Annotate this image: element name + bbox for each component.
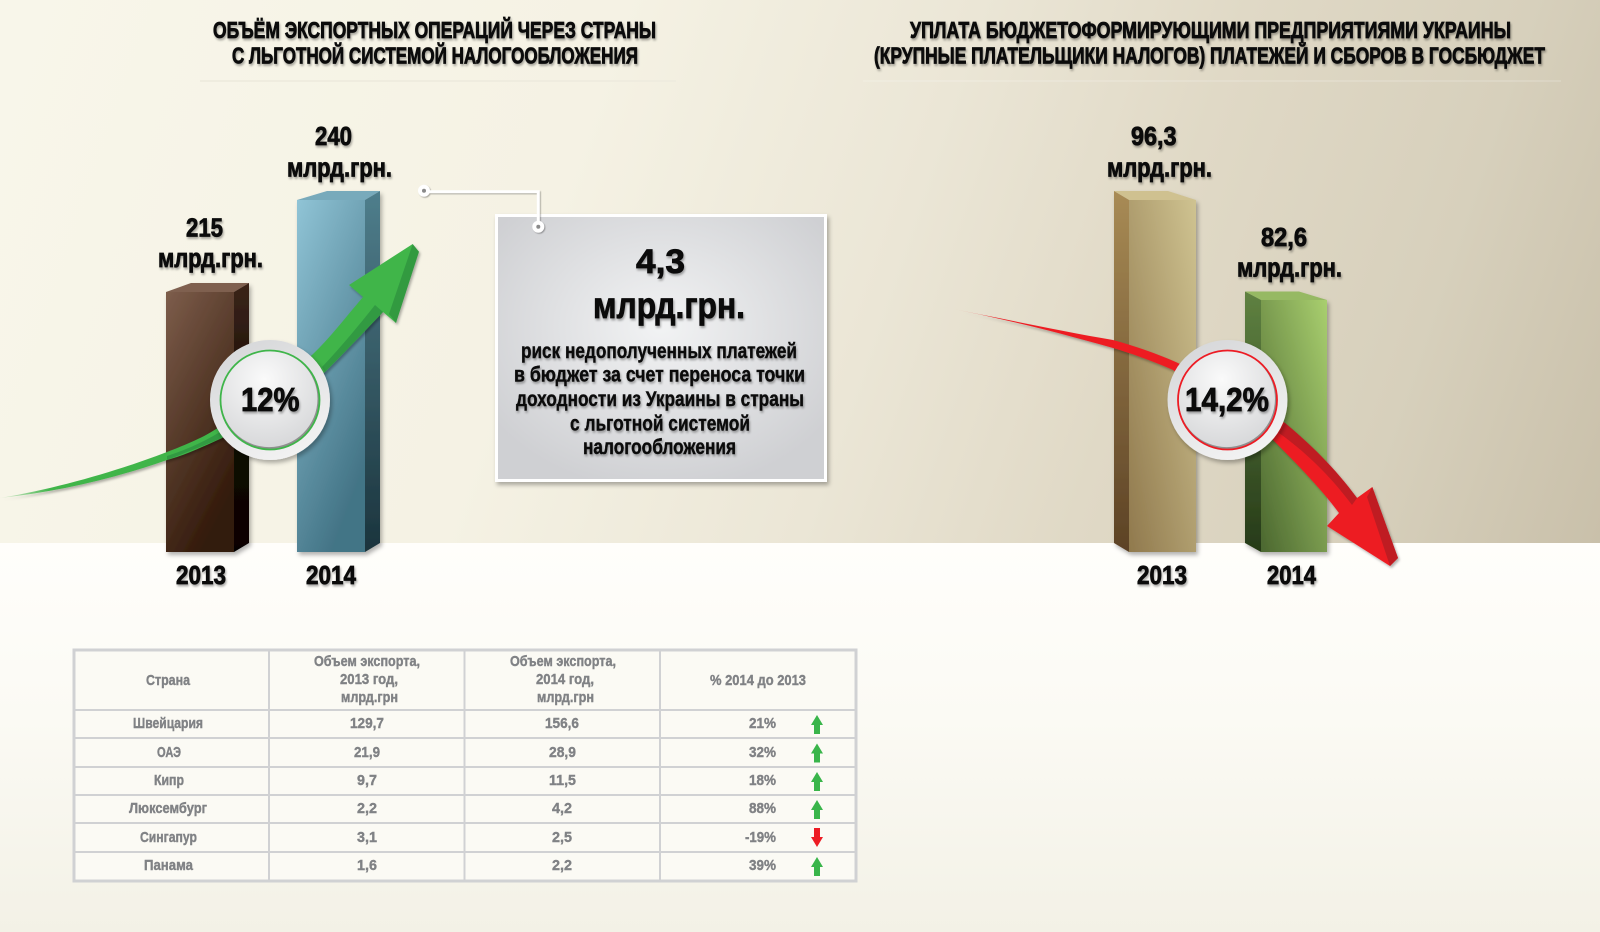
row: Люксембург: [129, 800, 823, 819]
value label: 240: [287, 121, 392, 182]
row: Швейцария: [133, 715, 823, 734]
year labels: export: 2013: [176, 560, 226, 590]
year labels: payments: 2014: [1267, 560, 1316, 590]
row: Сингапур: [140, 828, 823, 847]
row: ОАЭ: 21,9: [354, 744, 380, 761]
row: Кипр: 9,7: [357, 772, 377, 789]
callout: 4.3 bn risk: с льготной системой: [570, 412, 750, 436]
title: export operations: С ЛЬГОТНОЙ СИСТЕМОЙ НАЛОГООБЛОЖЕНИЯ: [232, 42, 638, 68]
table: export by country: [74, 650, 856, 881]
value label: 240: 240: [315, 121, 352, 151]
callout: 4.3 bn risk: млрд.грн.: [593, 285, 745, 326]
bar: payments 2014: [1245, 292, 1327, 552]
row: Люксембург: Люксембург: [129, 800, 207, 817]
year labels: export: 2014: [306, 560, 356, 590]
callout: 4.3 bn risk: доходности из Украины в страны: [516, 388, 804, 411]
row: Сингапур: 3,1: [357, 829, 377, 846]
arrow: red decline: [938, 306, 1398, 566]
year labels: payments: [1137, 560, 1316, 590]
callout: 4.3 bn risk: [496, 216, 826, 480]
table header: Страна: [146, 672, 191, 689]
year labels: export: [176, 560, 356, 590]
year labels: payments: 2013: [1137, 560, 1187, 590]
badge: 14,2%: 14,2%: [1185, 381, 1269, 418]
table header: млрд.грн: [341, 689, 398, 706]
value label: 96,3: млрд.грн.: [1107, 152, 1212, 182]
row: Швейцария: 21%: [749, 715, 776, 732]
title: export operations: [213, 16, 656, 68]
table header: 2013 год,: [340, 671, 398, 688]
row: Панама: 1,6: [357, 857, 377, 874]
badge: 14,2%: [1168, 340, 1288, 460]
row: ОАЭ: [157, 744, 823, 762]
row: Кипр: Кипр: [154, 772, 184, 789]
row: ОАЭ: ОАЭ: [157, 744, 181, 761]
value label: 215: 215: [186, 212, 223, 242]
row: Сингапур: Сингапур: [140, 829, 197, 846]
callout: 4.3 bn risk: налогообложения: [583, 436, 736, 459]
title: export operations: ОБЪЁМ ЭКСПОРТНЫХ ОПЕРАЦИЙ ЧЕРЕЗ СТРАНЫ: [213, 16, 656, 43]
callout: 4.3 bn risk: риск недополученных платежей: [521, 340, 797, 363]
connector line: [418, 185, 544, 233]
bar: export 2013: [166, 283, 249, 552]
value label: 96,3: 96,3: [1131, 121, 1176, 151]
row: ОАЭ: 32%: [749, 744, 776, 761]
badge: 12%: [210, 340, 330, 460]
arrow: green growth: [0, 244, 419, 498]
row: Сингапур: -19%: [745, 829, 776, 846]
row: Люксембург: 4,2: [552, 800, 572, 817]
row: Панама: [144, 857, 823, 876]
bar: payments 2013: [1114, 191, 1196, 552]
table header: млрд.грн: [537, 689, 594, 706]
value label: 96,3: [1107, 121, 1212, 182]
table header: Объем экспорта,: [510, 653, 616, 670]
bar: export 2014: [297, 191, 380, 552]
row: Швейцария: 129,7: [350, 715, 384, 732]
row: Люксембург: 2,2: [357, 800, 377, 817]
table header: 2014 год,: [536, 671, 594, 688]
table header: [146, 653, 806, 706]
table header: % 2014 до 2013: [710, 672, 806, 689]
value label: 240: млрд.грн.: [287, 152, 392, 182]
value label: 215: [158, 212, 263, 273]
title: budget payments: [874, 17, 1545, 68]
row: Кипр: 18%: [749, 772, 776, 789]
row: Панама: 2,2: [552, 857, 572, 874]
row: Сингапур: 2,5: [552, 829, 572, 846]
row: Швейцария: 156,6: [545, 715, 579, 732]
row: Панама: 39%: [749, 857, 776, 874]
row: ОАЭ: 28,9: [549, 744, 576, 761]
row: Швейцария: Швейцария: [133, 715, 203, 732]
row: Кипр: 11,5: [549, 772, 576, 789]
row: Кипр: [154, 772, 823, 791]
value label: 215: млрд.грн.: [158, 243, 263, 273]
value label: 82,6: 82,6: [1261, 222, 1307, 252]
callout: 4.3 bn risk: в бюджет за счет переноса точки: [514, 364, 805, 386]
row: Панама: Панама: [144, 857, 194, 874]
row: Люксембург: 88%: [749, 800, 776, 817]
value label: 82,6: [1237, 222, 1342, 282]
callout: 4.3 bn risk: 4,3: [636, 243, 685, 281]
badge: 12%: 12%: [241, 381, 300, 418]
value label: 82,6: млрд.грн.: [1237, 252, 1342, 282]
table header: Объем экспорта,: [314, 653, 420, 670]
